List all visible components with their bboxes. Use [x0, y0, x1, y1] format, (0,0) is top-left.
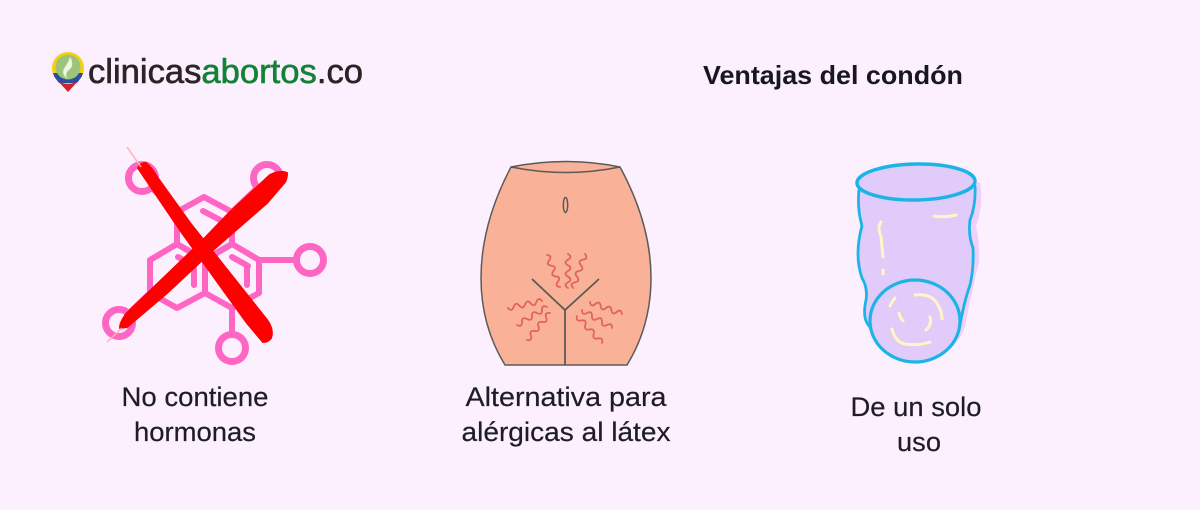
- icon: red cross: [107, 147, 287, 342]
- logo text: clinicasabortos.co: [88, 53, 363, 91]
- panel: de un solo uso: [850, 163, 982, 457]
- caption: uso: [897, 427, 941, 457]
- panel: alternativa para alérgicas al látex: [462, 162, 671, 447]
- caption: alérgicas al látex: [462, 417, 671, 447]
- icon: map pin: [52, 52, 84, 92]
- panel: no contiene hormonas: [106, 147, 324, 447]
- caption: De un solo: [850, 392, 982, 422]
- caption: No contiene: [122, 382, 268, 412]
- rash lines: [508, 254, 622, 343]
- icon: pelvis illustration: [481, 162, 651, 365]
- caption: Alternativa para: [466, 382, 668, 412]
- caption: hormonas: [134, 417, 256, 447]
- logo: [52, 52, 363, 92]
- icon: condom: [857, 163, 981, 364]
- icon: hormone molecule: [106, 164, 324, 362]
- title: Ventajas del condón: [703, 60, 963, 90]
